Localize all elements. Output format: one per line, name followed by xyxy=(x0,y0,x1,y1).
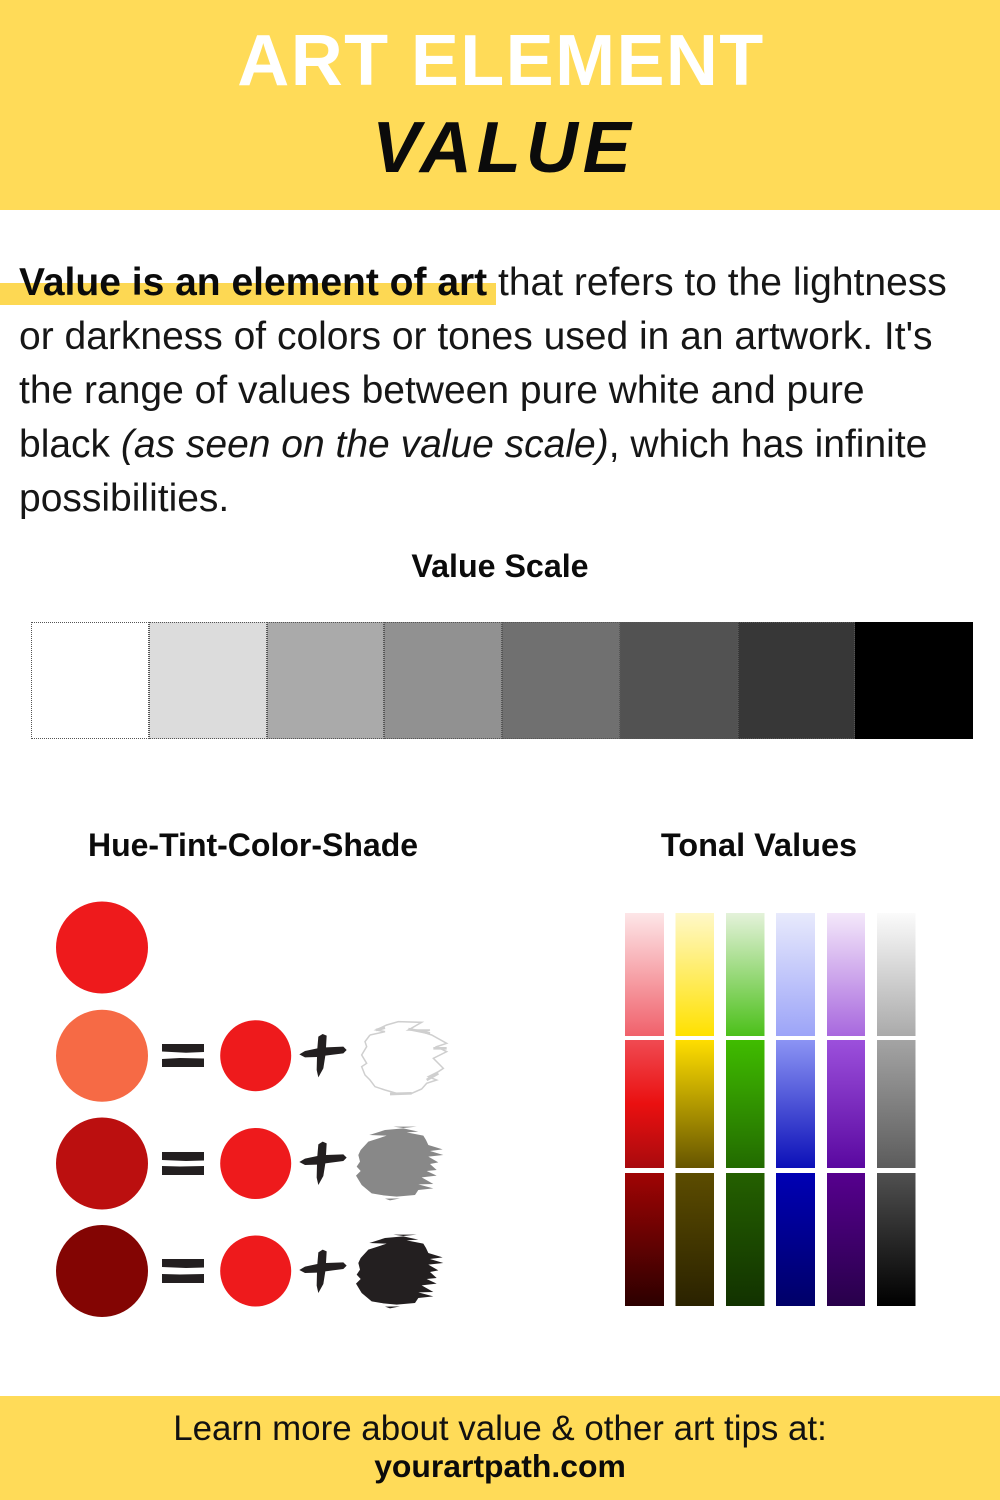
blue column xyxy=(776,913,815,1306)
title: ART ELEMENT: ART ELEMENT xyxy=(237,21,765,101)
heading: Hue-Tint-Color-Shade: Hue-Tint-Color-Shade xyxy=(88,827,418,863)
heading: Tonal Values: Tonal Values xyxy=(661,827,857,863)
shade with black equation xyxy=(56,1225,443,1317)
heading: Value Scale: Value Scale xyxy=(411,548,589,584)
header banner xyxy=(0,0,1000,210)
footer link: yourartpath.com xyxy=(374,1448,626,1484)
footer banner xyxy=(0,1396,1000,1500)
intro paragraph: the range of values between pure white and pure xyxy=(19,369,865,412)
green column xyxy=(726,913,764,1306)
red column xyxy=(625,913,664,1306)
value scale xyxy=(31,622,973,739)
intro paragraph: black (as seen on the value scale), which has infinite xyxy=(19,423,927,466)
highlight bar xyxy=(0,283,496,305)
intro paragraph: or darkness of colors or tones used in an artwork. It's xyxy=(19,315,933,358)
hue circle xyxy=(56,902,148,994)
purple column xyxy=(827,913,865,1306)
shade with gray equation xyxy=(56,1118,443,1210)
yellow column xyxy=(676,913,714,1306)
intro paragraph xyxy=(19,261,947,520)
gray column xyxy=(877,913,916,1306)
intro paragraph: Value is an element of art that refers to the lightness xyxy=(19,261,947,304)
title: VALUE: VALUE xyxy=(372,108,636,188)
tint equation xyxy=(56,1010,447,1102)
footer text: Learn more about value & other art tips at: xyxy=(173,1409,827,1448)
intro paragraph: possibilities. xyxy=(19,477,229,520)
